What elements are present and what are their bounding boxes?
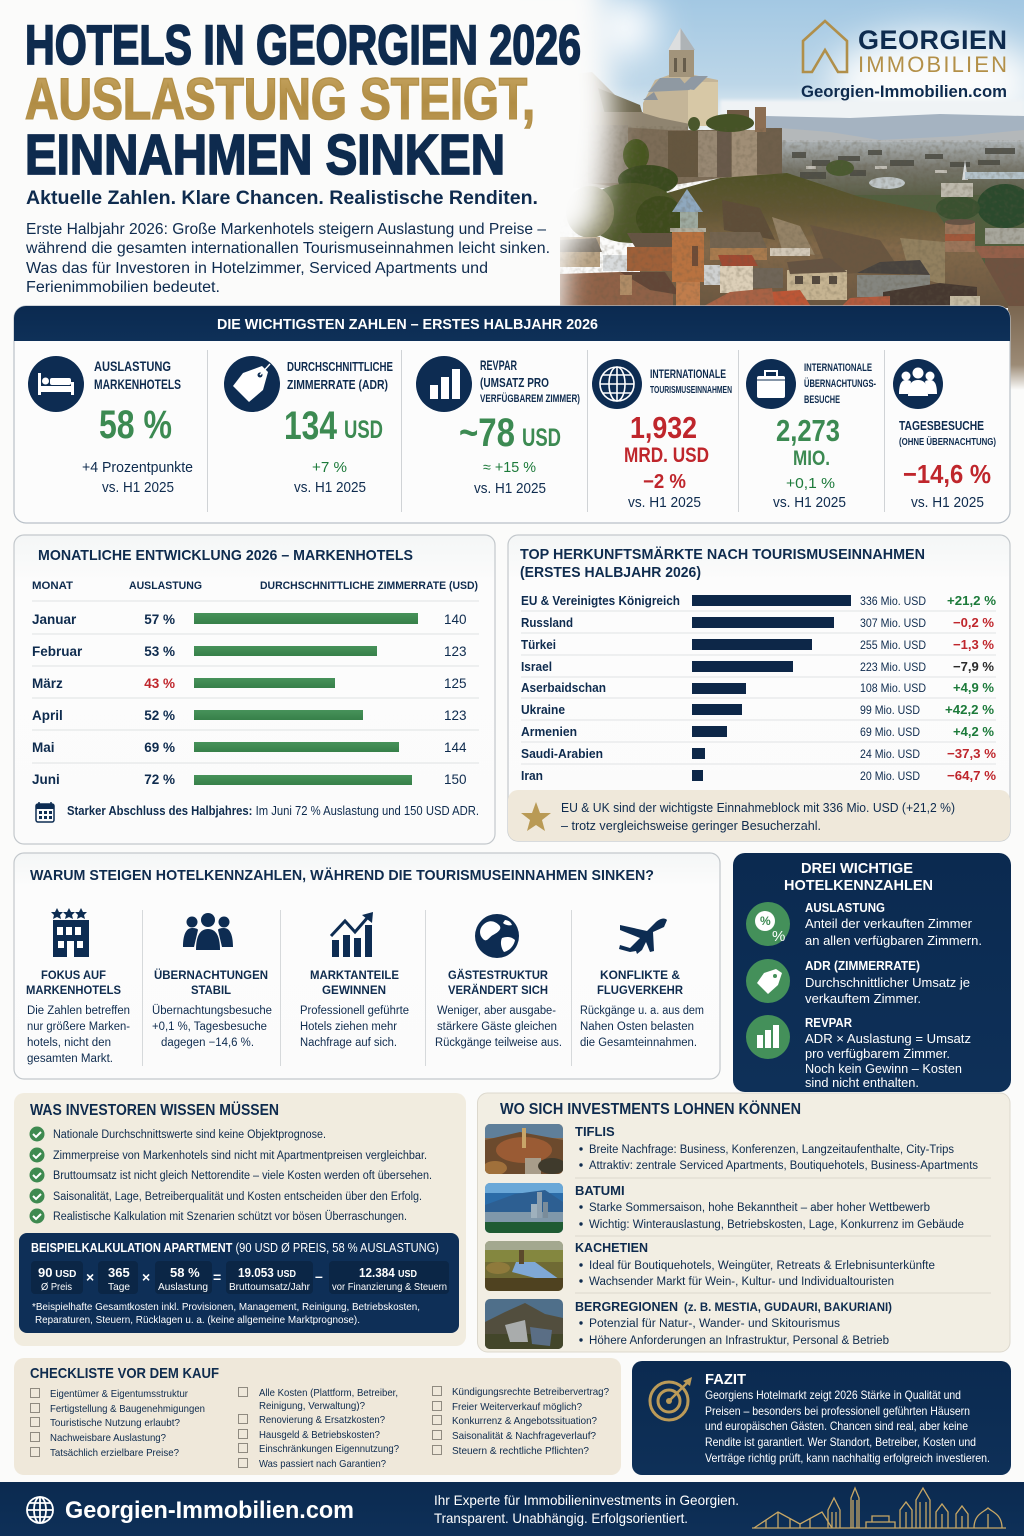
icon: people — [893, 359, 943, 409]
bar chart: monthly rows — [32, 612, 467, 787]
kpi: RevPAR: USD — [522, 424, 561, 452]
title: EINNAHMEN SINKEN — [25, 123, 505, 187]
bright haze under title — [520, 0, 634, 306]
callout: EU and UK: EU & UK sind der wichtigste Einnahmeblock mit 336 Mio. USD (+21,2 %) — [561, 801, 955, 815]
bar chart: monthly rows: 123 — [444, 644, 467, 659]
metric: Auslastung: % — [760, 914, 771, 928]
panel: conclusion — [632, 1361, 1011, 1475]
table header: AUSLASTUNG — [129, 580, 202, 592]
heading: MONATLICHE ENTWICKLUNG 2026 – MARKENHOTELS — [38, 547, 413, 564]
reason: Gästestruktur — [435, 914, 562, 1049]
region: Tiflis: TIFLIS — [575, 1124, 615, 1139]
photo: Tiflis — [483, 1124, 566, 1175]
checklist column 3 — [452, 1386, 609, 1457]
bar chart: markets: 336 Mio. USD — [860, 594, 926, 608]
bar chart: monthly rows: 72 % — [144, 772, 175, 787]
metric: RevPAR: ADR × Auslastung = Umsatz — [805, 1032, 971, 1046]
photo: Kachetien — [485, 1241, 563, 1291]
metric: Auslastung: Anteil der verkauften Zimmer — [805, 917, 972, 931]
reason: Übernachtungen stabil: ÜBERNACHTUNGEN — [154, 967, 268, 982]
kpi: ADR: USD — [344, 416, 383, 444]
bar chart: markets: −1,3 % — [953, 637, 994, 652]
checklist column 1: Nachweisbare Auslastung? — [50, 1432, 166, 1444]
icon: globe — [475, 914, 519, 958]
bar chart: markets: Ukraine — [521, 703, 565, 717]
reason: Konflikte & Flugverkehr — [580, 919, 704, 1049]
calculation box: 12.384 USD — [359, 1265, 417, 1280]
metric: ADR: Durchschnittlicher Umsatz je — [805, 976, 970, 990]
region: Batumi — [485, 1183, 964, 1233]
bar chart: monthly rows: 57 % — [144, 612, 175, 627]
kpi: Tagesbesuche: TAGESBESUCHE — [899, 418, 984, 433]
icon: calendar — [36, 802, 54, 822]
checklist column 2: Einschränkungen Eigennutzung? — [259, 1443, 399, 1455]
panel: monthly development — [14, 535, 495, 844]
region: Kachetien: Wachsender Markt für Wein-, Kultur- und Individualtouristen — [589, 1276, 894, 1288]
calculation box — [19, 1233, 459, 1333]
calculation box: 90 USD — [38, 1265, 76, 1280]
checklist column 1: Touristische Nutzung erlaubt? — [50, 1417, 180, 1429]
panel: checklist — [14, 1358, 621, 1475]
reason: Fokus auf Markenhotels — [26, 908, 130, 1065]
reason: Marktanteile gewinnen: Hotels ziehen mehr — [300, 1021, 397, 1033]
bar chart: markets: Saudi-Arabien — [521, 747, 603, 761]
logo wordmark: GEORGIEN — [858, 25, 1007, 55]
kpi: RevPAR — [416, 356, 580, 497]
reason: Fokus auf Markenhotels: gesamten Markt. — [27, 1053, 113, 1065]
calculation box: × — [142, 1269, 150, 1285]
heading: CHECKLISTE VOR DEM KAUF — [30, 1365, 219, 1382]
conclusion text — [705, 1371, 990, 1465]
region: Tiflis: Attraktiv: zentrale Serviced Apartments, Boutiquehotels, Business-Apartments — [589, 1160, 978, 1172]
check list — [30, 1126, 432, 1224]
metric: Auslastung: an allen verfügbaren Zimmern. — [805, 934, 982, 948]
conclusion text: und europäischen Gästen. Chancen sind real, aber keine — [705, 1419, 968, 1433]
bar chart: monthly rows: März — [32, 676, 63, 691]
metric: RevPAR: Noch kein Gewinn – Kosten — [805, 1062, 962, 1076]
kpi: Übernachtungsbesuche — [746, 359, 876, 511]
icon: airplane — [619, 919, 667, 954]
checklist column 2: Hausgeld & Betriebskosten? — [259, 1429, 380, 1441]
region: Batumi: Wichtig: Winterauslastung, Betriebskosten, Lage, Konkurrenz im Gebäude — [589, 1219, 964, 1231]
kpi: Tourismuseinnahmen: TOURISMUSEINNAHMEN — [650, 384, 732, 396]
icon: bar chart — [416, 356, 472, 412]
kpi: Auslastung: +4 Prozentpunkte — [82, 460, 193, 476]
metric: Auslastung — [746, 901, 982, 948]
bar chart: markets: 223 Mio. USD — [860, 660, 926, 674]
bar chart: markets: +4,2 % — [953, 724, 994, 739]
reason: Fokus auf Markenhotels: hotels, nicht den — [27, 1037, 111, 1049]
calculation box: Tage — [108, 1281, 130, 1293]
table header — [32, 580, 478, 592]
checklist column 1: Tatsächlich erzielbare Preise? — [50, 1447, 179, 1459]
bar chart: markets: −64,7 % — [947, 768, 996, 783]
metric: ADR: verkauftem Zimmer. — [805, 992, 921, 1006]
icon: hotel with stars — [51, 908, 89, 957]
title — [25, 13, 581, 187]
photo strip at right edge — [1008, 306, 1024, 390]
panel header: DIE WICHTIGSTEN ZAHLEN – ERSTES HALBJAHR 2026 — [217, 316, 598, 333]
bar chart: monthly rows: Februar — [32, 644, 83, 659]
reason: Konflikte & Flugverkehr: Rückgänge u. a. aus dem — [580, 1005, 704, 1017]
calculation box: Bruttoumsatz/Jahr — [229, 1281, 310, 1293]
check list: Realistische Kalkulation mit Szenarien schützt vor bösen Überraschungen. — [53, 1211, 407, 1223]
intro text — [25, 221, 550, 296]
bar chart: markets: 255 Mio. USD — [860, 638, 926, 652]
kpi: ADR: DURCHSCHNITTLICHE — [287, 359, 393, 374]
region: Bergregionen: Potenzial für Natur-, Wander- und Skitourismus — [589, 1318, 840, 1330]
reason: Gästestruktur: stärkere Gäste gleichen — [437, 1021, 557, 1033]
reason: Gästestruktur: GÄSTESTRUKTUR — [448, 967, 548, 982]
bar chart: markets: Türkei — [521, 638, 556, 652]
region: Kachetien — [485, 1240, 935, 1291]
bar chart: markets: −0,2 % — [953, 615, 994, 630]
checklist column 2: Was passiert nach Garantien? — [259, 1458, 386, 1470]
logo: Georgien-Immobilien.com — [801, 82, 1007, 101]
houses — [560, 237, 600, 267]
checklist column 2: Renovierung & Ersatzkosten? — [259, 1414, 385, 1426]
texture overlay on land — [560, 125, 1024, 308]
kpi: Tourismuseinnahmen: 1,932 — [630, 410, 697, 445]
kpi: RevPAR: ~78 — [459, 411, 515, 455]
left rock and trees — [590, 72, 615, 112]
checklist column 1: Fertigstellung & Baugenehmigungen — [50, 1403, 205, 1415]
checklist column 2: Reinigung, Verwaltung)? — [259, 1400, 365, 1412]
reason: Gästestruktur: Weniger, aber ausgabe- — [437, 1005, 556, 1017]
reason: Übernachtungen stabil: +0,1 %, Tagesbesuche — [152, 1021, 267, 1033]
conclusion text: Rendite ist garantiert. Wer Standort, Betreiber, Kosten und — [705, 1435, 976, 1449]
kpi: RevPAR: (UMSATZ PRO — [480, 375, 549, 390]
footer — [0, 1482, 1024, 1536]
icon: bed — [28, 356, 84, 412]
kpi: ADR — [224, 356, 393, 496]
bar chart: markets — [521, 593, 996, 783]
reason: Konflikte & Flugverkehr: die Gesamteinnahmen. — [580, 1037, 697, 1049]
kpi: Auslastung — [28, 356, 193, 496]
conclusion text: Preisen – besonders bei professionell geführten Häusern — [705, 1404, 970, 1418]
bar chart: markets: 20 Mio. USD — [860, 769, 920, 783]
reason: Marktanteile gewinnen — [300, 912, 409, 1049]
reason: Übernachtungen stabil — [152, 913, 272, 1049]
kpi: RevPAR: vs. H1 2025 — [474, 481, 546, 497]
kpi: ADR: vs. H1 2025 — [294, 480, 366, 496]
callout: EU and UK: – trotz vergleichsweise geringer Besucherzahl. — [561, 819, 821, 833]
reason: Fokus auf Markenhotels: Die Zahlen betreffen — [27, 1005, 130, 1017]
bar chart: markets: 307 Mio. USD — [860, 616, 926, 630]
reason: Fokus auf Markenhotels: FOKUS AUF — [41, 968, 106, 982]
bar chart: monthly rows: 53 % — [144, 644, 175, 659]
panel: where investments pay off — [478, 1093, 1010, 1352]
check boxes — [30, 1386, 442, 1468]
metric: ADR — [746, 959, 970, 1006]
right round tower — [945, 222, 975, 252]
check list: Nationale Durchschnittswerte sind keine Objektprognose. — [53, 1129, 326, 1141]
icon: globe — [27, 1497, 53, 1523]
bar chart: markets: 24 Mio. USD — [860, 747, 920, 761]
calculation box: Reparaturen, Steuern, Rücklagen u. a. (keine allgemeine Marktprognose). — [35, 1315, 360, 1326]
bar chart: monthly rows: April — [32, 708, 63, 723]
title: AUSLASTUNG STEIGT, — [25, 67, 535, 132]
kpi: Übernachtungsbesuche: MIO. — [793, 447, 830, 470]
panel: what investors must know — [14, 1093, 466, 1346]
calculation box: vor Finanzierung & Steuern — [332, 1281, 447, 1293]
reason: Marktanteile gewinnen: Nachfrage auf sich. — [300, 1037, 397, 1049]
calculation box: 58 % — [170, 1265, 200, 1280]
reason: Fokus auf Markenhotels: nur größere Marken- — [27, 1021, 130, 1033]
bar chart: monthly rows: 69 % — [144, 740, 175, 755]
intro text: Was das für Investoren in Hotelzimmer, Serviced Apartments und — [26, 260, 488, 277]
panel: why hotel metrics rise — [14, 853, 720, 1079]
reason: Übernachtungen stabil: STABIL — [191, 983, 231, 997]
kpi: Tourismuseinnahmen: INTERNATIONALE — [650, 367, 726, 381]
bar chart: markets: −37,3 % — [947, 746, 996, 761]
heading: DREI WICHTIGE — [801, 860, 913, 877]
reason: Marktanteile gewinnen: GEWINNEN — [322, 983, 386, 997]
check list: Saisonalität, Lage, Betreiberqualität und Kosten entscheiden über den Erfolg. — [53, 1191, 422, 1203]
photo: Bergregionen — [485, 1299, 563, 1349]
checklist column 2 — [259, 1387, 399, 1470]
heading: WARUM STEIGEN HOTELKENNZAHLEN, WÄHREND DIE TOURISMUSEINNAHMEN SINKEN? — [30, 867, 654, 884]
intro text: während die gesamten internationallen Tourismuseinnahmen leicht sinken. — [25, 240, 550, 257]
checklist column 1 — [50, 1388, 205, 1459]
cliff — [640, 173, 1010, 308]
region: Tiflis — [483, 1124, 978, 1175]
intro text: Ferienimmobilien bedeutet. — [26, 279, 220, 296]
metric: RevPAR: REVPAR — [805, 1016, 852, 1030]
kpi: Übernachtungsbesuche: vs. H1 2025 — [773, 495, 846, 511]
icon: suitcase — [746, 359, 796, 409]
metric: Auslastung: % — [772, 928, 785, 945]
reason: Übernachtungen stabil: Übernachtungsbesuche — [152, 1005, 272, 1017]
bar chart: markets: Israel — [521, 660, 552, 674]
bar chart: monthly rows: 144 — [444, 740, 467, 755]
kpi: Auslastung: 58 % — [99, 403, 172, 447]
kpi: Übernachtungsbesuche: 2,273 — [776, 413, 840, 448]
region: Bergregionen: (z. B. MESTIA, GUDAURI, BAKURIANI) — [684, 1302, 892, 1314]
bar chart: monthly rows: 43 % — [144, 676, 175, 691]
bar chart: monthly rows: Juni — [32, 772, 60, 787]
kpi: Tourismuseinnahmen: vs. H1 2025 — [628, 495, 701, 511]
bar chart: monthly rows: 52 % — [144, 708, 175, 723]
hero photo: Tiflis with Narikala fortress — [560, 0, 1024, 308]
calculation box: 19.053 USD — [238, 1265, 296, 1280]
heading — [520, 546, 925, 581]
bar chart: monthly rows: Mai — [32, 740, 55, 755]
reason: Fokus auf Markenhotels: MARKENHOTELS — [26, 983, 121, 997]
region: Batumi: BATUMI — [575, 1183, 625, 1198]
bar chart: markets: +21,2 % — [947, 593, 996, 608]
heading: TOP HERKUNFTSMÄRKTE NACH TOURISMUSEINNAHMEN — [520, 546, 925, 563]
region: Bergregionen: Höhere Anforderungen an Infrastruktur, Personal & Betrieb — [589, 1335, 889, 1347]
icon: price tag — [224, 356, 280, 412]
kpi: ADR: 134 — [284, 404, 338, 448]
title: HOTELS IN GEORGIEN 2026 — [25, 13, 581, 76]
region: Kachetien: Ideal für Boutiquehotels, Weingüter, Retreats & Erlebnisunterkünfte — [589, 1260, 935, 1272]
kpi: Tagesbesuche: vs. H1 2025 — [911, 495, 984, 511]
kpi: Übernachtungsbesuche: +0,1 % — [786, 475, 835, 492]
calculation box: *Beispielhafte Gesamtkosten inkl. Provisionen, Management, Reinigung, Betriebskosten, — [32, 1302, 420, 1313]
heading: WO SICH INVESTMENTS LOHNEN KÖNNEN — [500, 1101, 801, 1118]
kpi: Übernachtungsbesuche: INTERNATIONALE — [804, 362, 872, 374]
bar chart: monthly rows: 140 — [444, 612, 467, 627]
metric: RevPAR: sind nicht enthalten. — [805, 1076, 919, 1090]
logo — [801, 21, 1007, 101]
checklist column 2: Alle Kosten (Plattform, Betreiber, — [259, 1387, 398, 1399]
table header: DURCHSCHNITTLICHE ZIMMERRATE (USD) — [260, 580, 478, 592]
reason: Marktanteile gewinnen: MARKTANTEILE — [310, 968, 399, 982]
calculation box: = — [213, 1269, 221, 1285]
kpi: ADR: ZIMMERRATE (ADR) — [287, 377, 388, 392]
calculation box: Ø Preis — [41, 1281, 72, 1293]
website: Georgien-Immobilien.com — [65, 1497, 354, 1524]
checklist column 3: Saisonalität & Nachfrageverlauf? — [452, 1430, 596, 1442]
panel: three hotel metrics — [733, 853, 1011, 1092]
bar chart: markets: 99 Mio. USD — [860, 703, 920, 717]
kpi: RevPAR: REVPAR — [480, 357, 517, 373]
logo: IMMOBILIEN — [858, 52, 1007, 77]
bar chart: markets: +4,9 % — [953, 680, 994, 695]
reason: Konflikte & Flugverkehr: Nahen Osten belasten — [580, 1021, 694, 1033]
slogan: Ihr Experte für Immobilieninvestments in Georgien. — [434, 1492, 739, 1508]
kpi: Auslastung: vs. H1 2025 — [102, 480, 174, 496]
heading: WAS INVESTOREN WISSEN MÜSSEN — [30, 1102, 279, 1119]
bar chart: markets: 108 Mio. USD — [860, 681, 926, 695]
reason: Konflikte & Flugverkehr: FLUGVERKEHR — [597, 983, 683, 997]
kpi: RevPAR: ≈ +15 % — [483, 460, 536, 476]
kpi: Tourismuseinnahmen: MRD. USD — [624, 444, 709, 467]
clock tower — [672, 232, 704, 282]
bar chart: monthly rows: Januar — [32, 612, 77, 627]
bar chart: markets: EU & Vereinigtes Königreich — [521, 594, 680, 608]
panel: source markets — [508, 535, 1010, 841]
icon: target with arrow — [650, 1377, 692, 1420]
bar chart: markets: −7,9 % — [953, 659, 994, 674]
icon: star — [521, 802, 551, 831]
metric: RevPAR — [746, 1015, 971, 1090]
region: Tiflis: Breite Nachfrage: Business, Konferenzen, Langzeitaufenthalte, City-Trips — [589, 1144, 954, 1156]
table header: MONAT — [32, 580, 73, 592]
panel: key figures — [14, 306, 1010, 523]
icon: people — [183, 913, 233, 950]
calculation box: Auslastung — [158, 1281, 208, 1293]
bar chart: markets: Iran — [521, 769, 543, 783]
checklist column 3: Konkurrenz & Angebotssituation? — [452, 1415, 597, 1427]
calculation box: 365 — [108, 1265, 130, 1280]
kpi: Tourismuseinnahmen — [592, 359, 732, 511]
kpi: ADR: +7 % — [312, 460, 347, 476]
region: Bergregionen: BERGREGIONEN — [575, 1299, 678, 1314]
heading: (ERSTES HALBJAHR 2026) — [520, 564, 701, 581]
heading: HOTELKENNZAHLEN — [784, 877, 933, 894]
checklist column 3: Freier Weiterverkauf möglich? — [452, 1401, 582, 1413]
reason: Übernachtungen stabil: dagegen −14,6 %. — [161, 1037, 254, 1049]
check list: Zimmerpreise von Markenhotels sind nicht mit Apartmentpreisen vergleichbar. — [53, 1150, 427, 1162]
bar chart: monthly rows: 123 — [444, 708, 467, 723]
bar chart: markets: Russland — [521, 616, 573, 630]
icon: globe — [592, 359, 642, 409]
heading — [784, 860, 933, 894]
reason: Marktanteile gewinnen: Professionell geführte — [300, 1005, 409, 1017]
region: Batumi: Starke Sommersaison, hohe Bekanntheit – aber hoher Wettbewerb — [589, 1202, 930, 1214]
bar chart: monthly rows: 150 — [444, 772, 467, 787]
metric: RevPAR: pro verfügbarem Zimmer. — [805, 1047, 950, 1061]
callout: EU and UK — [508, 790, 1010, 841]
calculation box: BEISPIELKALKULATION APARTMENT (90 USD Ø PREIS, 58 % AUSLASTUNG) — [31, 1241, 439, 1255]
kpi: Übernachtungsbesuche: BESUCHE — [804, 394, 840, 406]
reason: Konflikte & Flugverkehr: KONFLIKTE & — [600, 968, 680, 982]
bar chart: monthly rows: 125 — [444, 676, 467, 691]
conclusion text: Georgiens Hotelmarkt zeigt 2026 Stärke in Qualität und — [705, 1388, 961, 1402]
church — [643, 75, 718, 126]
subtitle: Aktuelle Zahlen. Klare Chancen. Realistische Renditen. — [26, 187, 538, 209]
kpi: Tagesbesuche — [893, 359, 996, 511]
reason: Gästestruktur: VERÄNDERT SICH — [448, 982, 548, 997]
intro text: Erste Halbjahr 2026: Große Markenhotels steigern Auslastung und Preise – — [26, 221, 546, 238]
note: Starker Abschluss des Halbjahres: Im Juni 72 % Auslastung und 150 USD ADR. — [67, 804, 479, 818]
checklist column 3: Kündigungsrechte Betreibervertrag? — [452, 1386, 609, 1398]
checklist column 3: Steuern & rechtliche Pflichten? — [452, 1445, 589, 1457]
conclusion text: FAZIT — [705, 1371, 746, 1388]
panel header — [14, 306, 1010, 341]
photo: Batumi — [485, 1183, 563, 1233]
trees — [623, 139, 649, 171]
kpi: Tourismuseinnahmen: −2 % — [643, 471, 686, 493]
bar chart: markets: Aserbaidschan — [521, 681, 606, 695]
metric: ADR: ADR (ZIMMERRATE) — [805, 959, 920, 973]
icon: house outline — [803, 21, 847, 72]
calculation box: × — [86, 1269, 94, 1285]
bar chart: markets: 69 Mio. USD — [860, 725, 920, 739]
footer: Transparent. Unabhängig. Erfolgsorientiert. — [434, 1510, 688, 1526]
kpi: RevPAR: VERFÜGBAREM ZIMMER) — [480, 392, 580, 405]
kpi: Übernachtungsbesuche: ÜBERNACHTUNGS- — [804, 377, 876, 390]
icon: rising chart — [331, 912, 373, 957]
check list: Bruttoumsatz ist nicht gleich Nettorendite – viele Kosten werden oft übersehen. — [53, 1170, 432, 1182]
region: Kachetien: KACHETIEN — [575, 1240, 648, 1255]
calculation box: – — [315, 1268, 323, 1284]
fortress wall — [592, 128, 774, 186]
region: Bergregionen — [485, 1299, 892, 1349]
kpi: Tagesbesuche: −14,6 % — [903, 459, 991, 489]
checklist column 1: Eigentümer & Eigentumsstruktur — [50, 1388, 188, 1400]
bar chart: markets: Armenien — [521, 725, 577, 739]
skyline illustration — [752, 1488, 1006, 1528]
metric: Auslastung: AUSLASTUNG — [805, 901, 885, 915]
kpi: Auslastung: AUSLASTUNG — [94, 358, 171, 374]
kpi: Auslastung: MARKENHOTELS — [94, 376, 181, 392]
reason: Gästestruktur: Rückgänge teilweise aus. — [435, 1037, 562, 1049]
conclusion text: Verträge richtig prüft, kann nachhaltig erfolgreich investieren. — [705, 1451, 990, 1465]
bar chart: markets: +42,2 % — [945, 702, 994, 717]
